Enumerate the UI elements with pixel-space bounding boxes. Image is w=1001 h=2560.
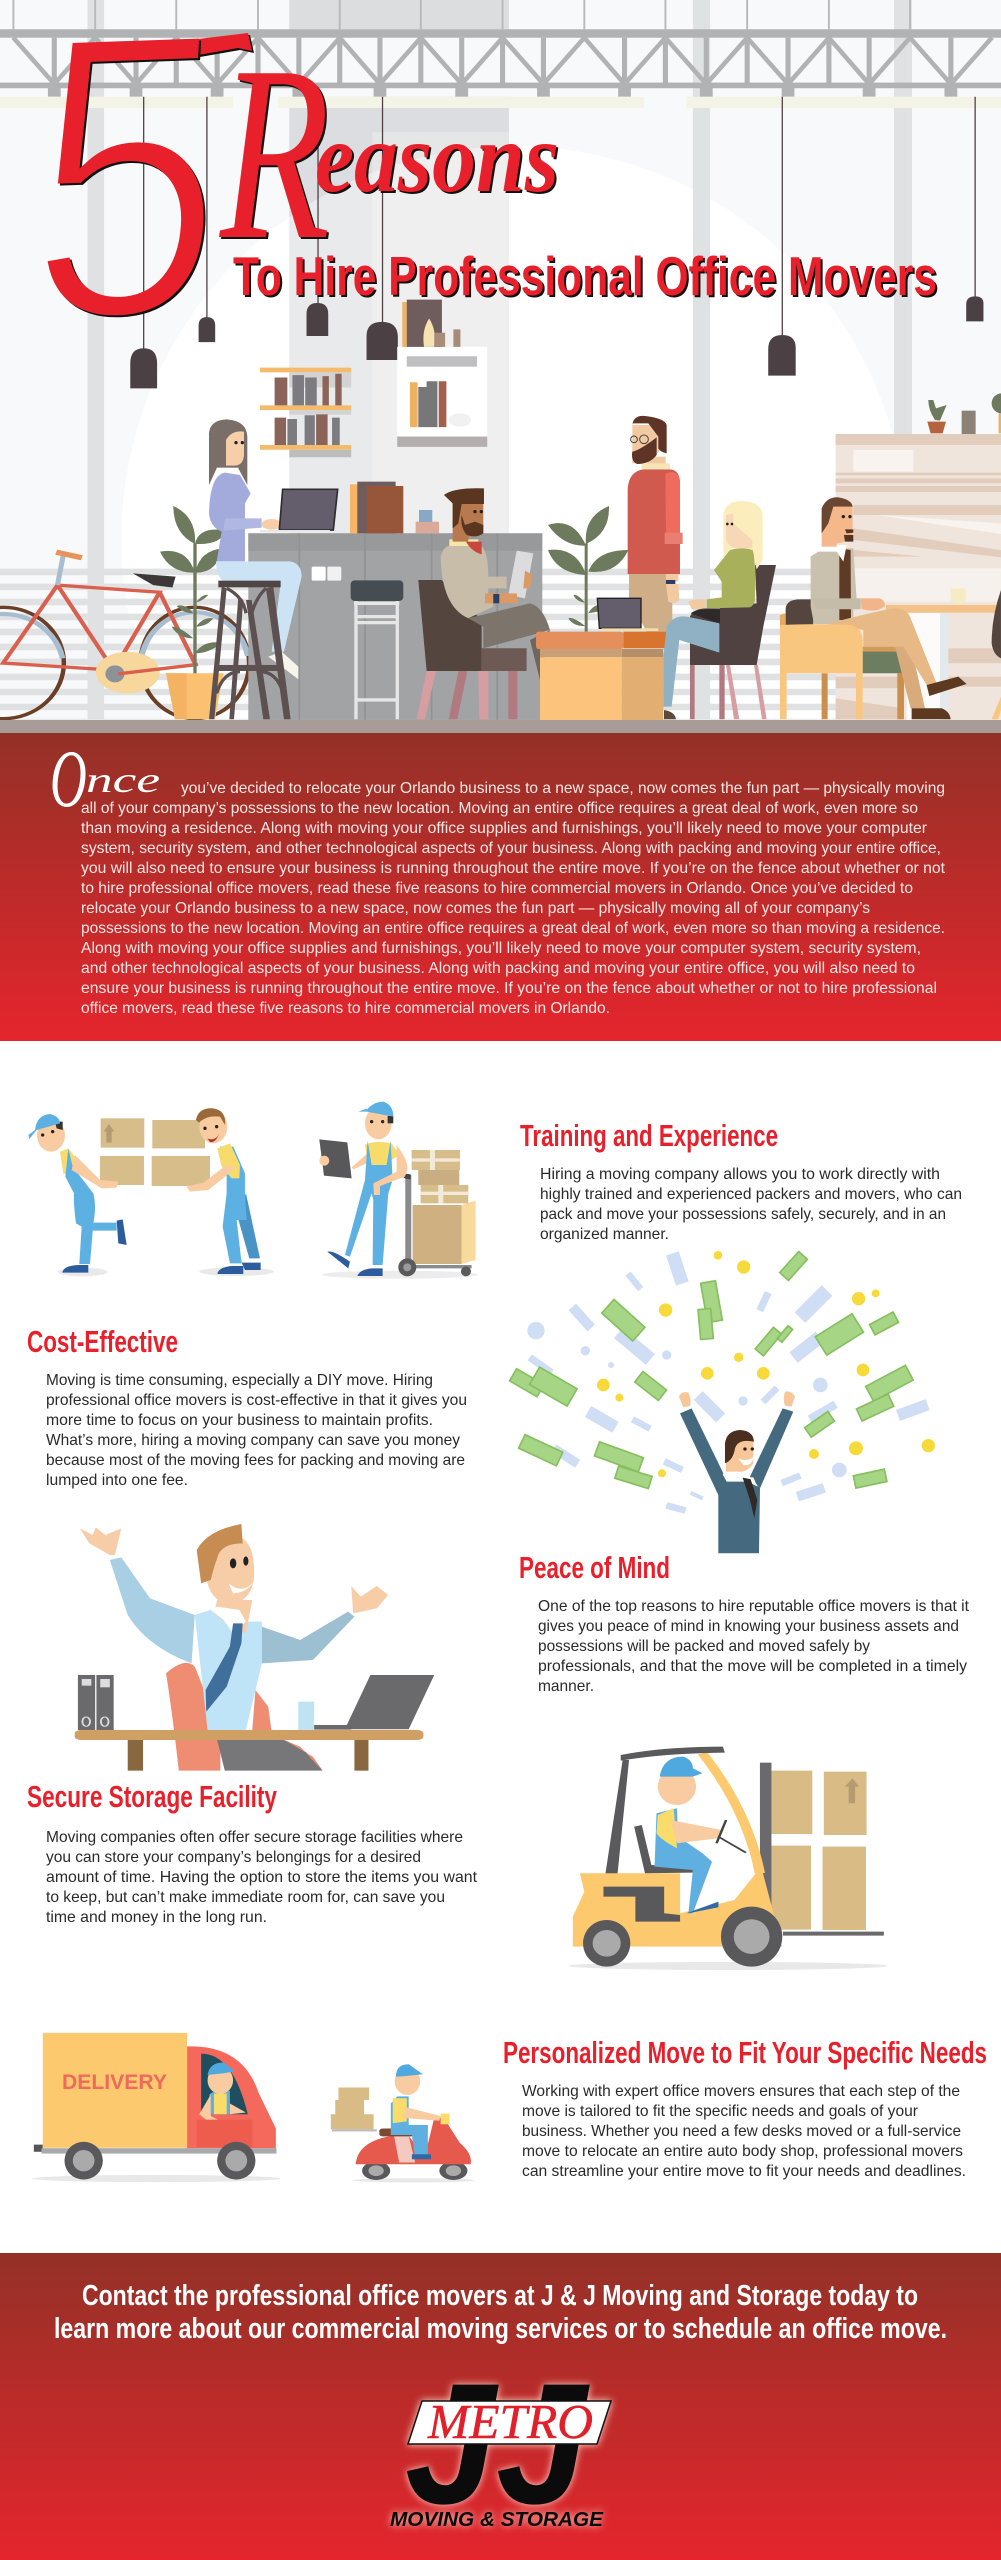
intro panel <box>0 733 1001 1041</box>
intro paragraph: Along with moving your office supplies and furnishings, you’ll likely need to move your computer system, security system, <box>81 940 921 957</box>
intro paragraph: possessions to the new location. Moving an entire office requires a great deal of work, even more so than moving a residence. <box>81 920 945 937</box>
section: peace of mind: possessions will be packed and moved safely by <box>538 1638 870 1655</box>
script word Once <box>50 733 160 824</box>
plant by table <box>548 506 628 632</box>
numeral 5 <box>48 33 254 318</box>
word Reasons: easons <box>315 102 559 213</box>
logo: J J Metro Moving & Storage: MOVING & STORAGE <box>390 2509 604 2531</box>
section: personalized move: move is tailored to fit the specific needs and goals of your <box>522 2103 919 2120</box>
intro paragraph: ensure your business is running throughout the entire move. If you’re on the fence about whether or not to hire professional <box>81 980 937 997</box>
section: personalized move <box>503 2035 987 2180</box>
section: cost-effective: professional office movers is cost-effective in that it gives you <box>46 1392 467 1409</box>
wall shelves and books <box>260 300 487 457</box>
section: cost-effective: What’s more, hiring a moving company can save you money <box>46 1432 460 1449</box>
intro paragraph: system, security system, and other technological aspects of your business. Along with packing and moving your entire office, <box>81 840 941 857</box>
intro paragraph: to hire professional office movers, read these five reasons to hire commercial movers in Orlando. Once you’ve decided to <box>81 880 913 897</box>
illustration: mover with clipboard and cart <box>319 1102 478 1279</box>
intro paragraph: all of your company’s possessions to the new location. Moving an entire office requires a great deal of work, even more so <box>81 800 918 817</box>
bar stool <box>209 581 291 719</box>
word Reasons: easons <box>317 104 561 215</box>
green bills <box>510 1252 913 1489</box>
contact footer panel <box>0 2253 1001 2560</box>
call to action <box>54 2280 947 2345</box>
section: personalized move: move to relocate an entire auto body shop, professional movers <box>522 2143 963 2160</box>
illustration: delivery truck: DELIVERY <box>62 2071 167 2094</box>
word Reasons: R <box>218 15 330 292</box>
section: cost-effective: Moving is time consuming, especially a DIY move. Hiring <box>46 1372 433 1389</box>
section: personalized move: can streamline your entire move to fit your needs and deadlines. <box>522 2163 966 2180</box>
section: peace of mind: Peace of Mind <box>519 1550 670 1585</box>
section: secure storage facility: Secure Storage Facility <box>27 1779 278 1814</box>
reception scene: woman, counter, stools, seated man <box>160 419 550 720</box>
intro paragraph: you’ve decided to relocate your Orlando business to a new space, now comes the fun part — physically moving <box>181 780 945 797</box>
section: peace of mind: professionals, and that the move will be completed in a timely <box>538 1658 967 1675</box>
blonde woman in chair <box>663 501 776 719</box>
man seated at right <box>780 497 1001 719</box>
blue bills and coins <box>527 1251 930 1514</box>
section: cost-effective: Cost-Effective <box>27 1324 178 1359</box>
section: secure storage facility: to keep, but can’t make immediate room for, can save you <box>46 1889 445 1906</box>
section: secure storage facility <box>27 1779 478 1926</box>
seated man with tablet <box>417 488 550 719</box>
section: peace of mind: One of the top reasons to hire reputable office movers is that it <box>538 1598 970 1615</box>
potted plant <box>160 506 224 719</box>
box table with laptop <box>536 598 671 720</box>
section: cost-effective <box>27 1324 467 1489</box>
section: peace of mind: gives you peace of mind in knowing your business assets and <box>538 1618 959 1635</box>
illustration: delivery truck <box>32 2033 281 2182</box>
word Reasons <box>218 15 561 294</box>
word Reasons: R <box>220 17 332 294</box>
section: cost-effective: lumped into one fee. <box>46 1472 188 1489</box>
intro paragraph: office movers, read these five reasons to hire commercial movers in Orlando. <box>81 1000 610 1017</box>
illustration: raining money <box>510 1251 935 1553</box>
wood counter with plants <box>836 393 1001 720</box>
section: secure storage facility: time and money in the long run. <box>46 1909 267 1926</box>
pendant lamps <box>130 97 983 388</box>
script word Once: O <box>50 733 87 824</box>
section: peace of mind: manner. <box>538 1678 594 1695</box>
businessman with raised arms <box>679 1391 795 1553</box>
section: personalized move: Working with expert office movers ensures that each step of the <box>522 2083 960 2100</box>
section: training and experience: Training and Experience <box>520 1118 778 1153</box>
section: secure storage facility: you can store your company’s belongings for a desired <box>46 1849 421 1866</box>
illustration: happy man at desk <box>75 1524 434 1771</box>
section: training and experience: pack and move your possessions safely, securely, and in an <box>540 1206 946 1223</box>
logo: J J Metro Moving & Storage: JJ <box>405 2348 590 2540</box>
hero office illustration <box>0 0 1001 932</box>
illustration: movers carrying box <box>28 1108 274 1276</box>
section: training and experience: highly trained and experienced packers and movers, who can <box>540 1186 962 1203</box>
section: cost-effective: more time to focus on your business to maintain profits. <box>46 1412 433 1429</box>
section: cost-effective: because most of the moving fees for packing and moving are <box>46 1452 465 1469</box>
intro paragraph: relocate your Orlando business to a new space, now comes the fun part — physically moving all of your company’s <box>81 900 870 917</box>
section: training and experience <box>520 1118 962 1243</box>
script word Once: nce <box>86 760 160 800</box>
intro paragraph: you will also need to ensure your business is running throughout the entire move. If you’re on the fence about whether or not <box>81 860 946 877</box>
white-frame stool <box>351 580 403 719</box>
intro paragraph: and other technological aspects of your business. Along with packing and moving your entire office, you will also need to <box>81 960 915 977</box>
intro paragraph <box>81 780 946 1017</box>
logo: J J Metro Moving & Storage: METRO <box>427 2394 593 2449</box>
intro paragraph: than moving a residence. Along with moving your office supplies and furnishings, you’ll likely need to move your computer <box>81 820 928 837</box>
lounge scene: standing man, woman, seated man, wood counter <box>536 393 1001 720</box>
section: personalized move: business. Whether you need a few desks moved or a full-service <box>522 2123 961 2140</box>
gold coins <box>597 1251 935 1477</box>
section: secure storage facility: amount of time. Having the option to store the items you want <box>46 1869 478 1886</box>
section: secure storage facility: Moving companies often offer secure storage facilities where <box>46 1829 463 1846</box>
woman at laptop <box>209 419 338 679</box>
section: peace of mind <box>519 1550 970 1695</box>
standing man <box>628 416 683 632</box>
bicycle <box>0 552 249 719</box>
illustration: forklift <box>568 1747 888 1970</box>
counter <box>248 482 542 720</box>
section: training and experience: organized manner. <box>540 1226 669 1243</box>
section: training and experience: Hiring a moving company allows you to work directly with <box>540 1166 940 1183</box>
illustration: scooter courier <box>331 2064 474 2182</box>
title <box>48 33 938 318</box>
